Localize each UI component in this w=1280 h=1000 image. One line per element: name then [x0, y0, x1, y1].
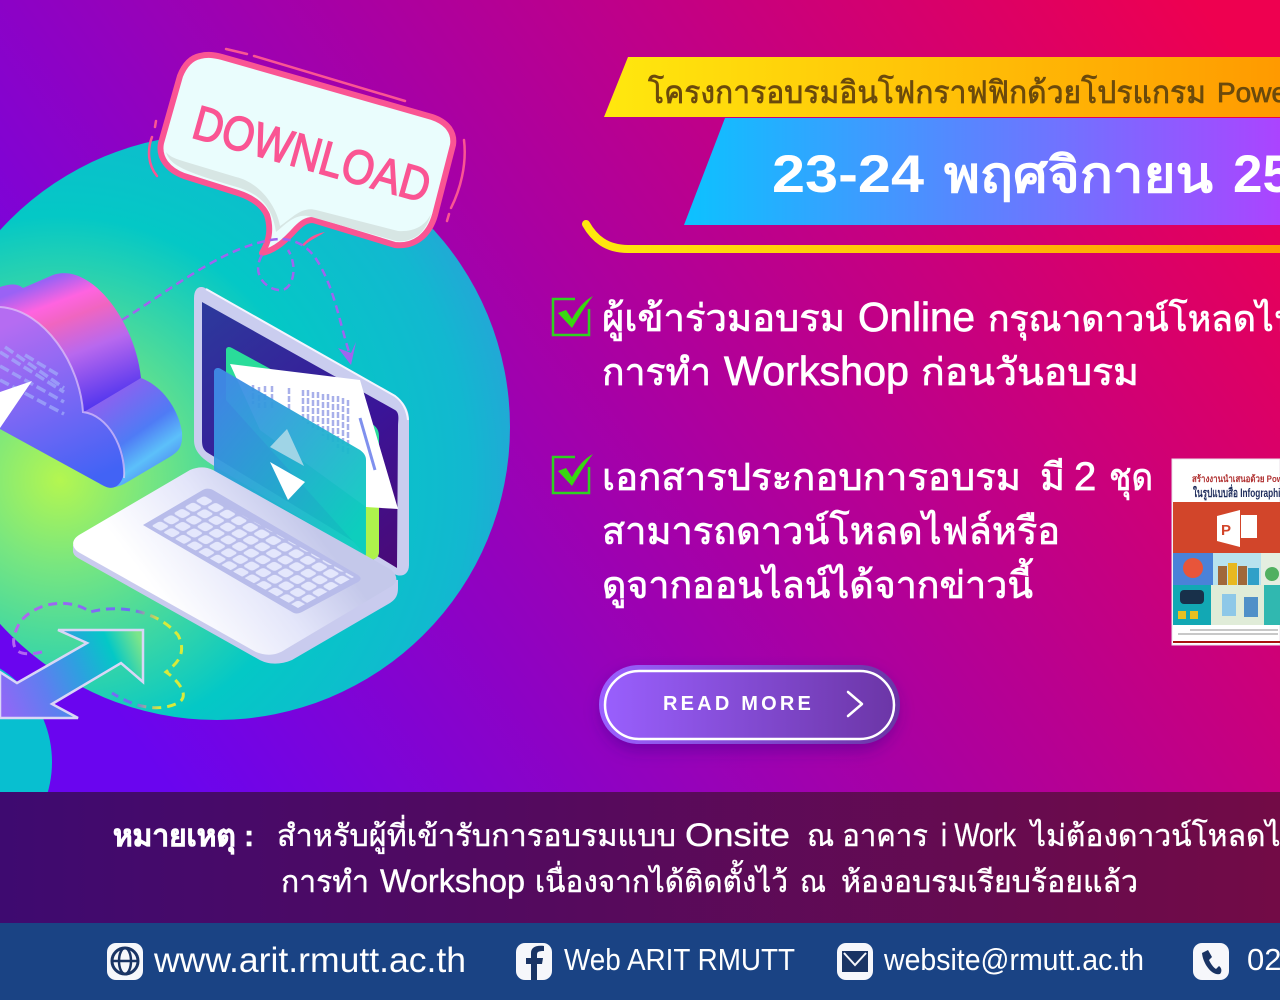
- upload download arrow: [0, 630, 143, 718]
- blue folder front: [214, 368, 366, 560]
- checklist item 2: [553, 454, 1153, 608]
- checklist item 1: ผู้เข้าร่วมอบรม: [602, 297, 845, 341]
- chevron icon: [848, 692, 862, 716]
- icon: facebook: [516, 943, 552, 980]
- laptop screen: [194, 287, 409, 576]
- checklist item 2: สามารถดาวน์โหลดไฟล์หรือ: [602, 510, 1060, 552]
- header: date banner: [684, 118, 1280, 225]
- checklist item 2: มี: [1040, 456, 1065, 498]
- banner title: โครงการอบรมอินโฟกราฟฟิกด้วยโปรแกรม: [648, 75, 1206, 110]
- facebook page: Web ARIT RMUTT: [564, 942, 795, 977]
- checklist item 1: ก่อนวันอบรม: [921, 351, 1139, 393]
- document pages: [230, 364, 398, 509]
- small teal circle: [0, 652, 52, 872]
- checklist item 2: เอกสารประกอบการอบรม: [602, 456, 1021, 498]
- note text: สำหรับผู้ที่เข้ารับการอบรมแบบ: [277, 815, 676, 854]
- note text: ห้องอบรมเรียบร้อยแล้ว: [841, 866, 1138, 899]
- teal background circle: [0, 134, 510, 720]
- date: [772, 145, 1280, 204]
- dashed cloud outline: [14, 603, 183, 708]
- note text: ณ: [800, 866, 826, 899]
- checklist item 1: การทำ: [602, 351, 711, 393]
- laptop base: [73, 545, 398, 664]
- checklist item 1: [553, 294, 1280, 394]
- date: 23-24: [772, 145, 925, 204]
- note text: Onsite: [685, 817, 790, 853]
- date: พฤศจิกายน: [944, 147, 1213, 203]
- checklist item 2: 2: [1074, 455, 1096, 499]
- note text: [277, 815, 1280, 899]
- note text: i Work: [941, 817, 1017, 853]
- document thumbnail: P: [1221, 522, 1231, 539]
- dashed path to laptop: [122, 239, 350, 355]
- cloud icon: [0, 273, 182, 488]
- transfer arrows: [270, 429, 304, 466]
- note text: เนื่องจากได้ติดตั้งไว้: [535, 860, 788, 899]
- green folder back: [226, 347, 379, 560]
- note text: Workshop: [380, 863, 525, 899]
- checkbox icon: [553, 454, 593, 493]
- yellow underline curve: [586, 224, 1280, 249]
- checklist item 1: Online: [858, 294, 975, 340]
- note label: หมายเหตุ :: [113, 820, 254, 855]
- note text: ณ อาคาร: [807, 820, 928, 853]
- icon: mail: [837, 943, 873, 980]
- document thumbnail: [1172, 459, 1280, 645]
- checklist item 2: ดูจากออนไลน์ได้จากข่าวนี้: [602, 558, 1034, 608]
- speech bubble: download: [149, 49, 465, 253]
- checkbox icon: [553, 296, 593, 335]
- checklist item 1: Workshop: [724, 348, 909, 394]
- checklist item 2: ชุด: [1109, 456, 1153, 500]
- note band: [0, 792, 1280, 923]
- bubble label: DOWNLOAD: [187, 97, 436, 214]
- footer bar: [0, 923, 1280, 1000]
- icon: phone: [1193, 943, 1229, 980]
- website: www.arit.rmutt.ac.th: [153, 941, 466, 980]
- icon: globe: [107, 943, 143, 980]
- laptop: [73, 287, 409, 664]
- header: yellow banner: [604, 57, 1280, 117]
- illustration: download laptop scene: [0, 49, 510, 872]
- dashed arrow head: [338, 342, 356, 365]
- email: website@rmutt.ac.th: [883, 942, 1144, 977]
- read more button: READ MORE: [663, 693, 814, 715]
- keyboard: [143, 489, 361, 614]
- note text: การทำ: [281, 866, 369, 899]
- read more button: [599, 665, 900, 750]
